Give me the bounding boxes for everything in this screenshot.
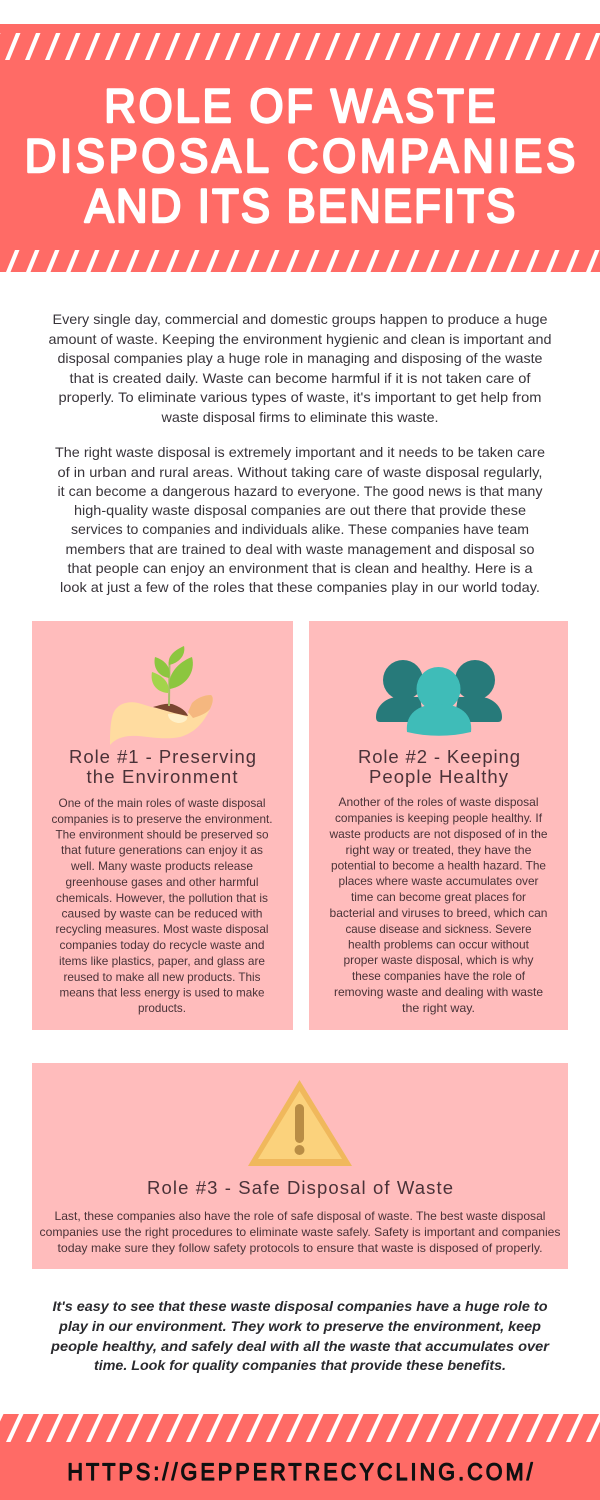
body text: The environment should be preserved so — [56, 828, 269, 842]
heading — [69, 746, 256, 787]
intro paragraph 2: look at just a few of the roles that these companies play in our world today. — [60, 580, 540, 595]
intro paragraph 1: properly. To eliminate various types of waste, it's important to get help from — [58, 390, 542, 405]
intro paragraph 1: Every single day, commercial and domestic groups happen to produce a huge — [52, 312, 548, 327]
heading: the Environment — [86, 766, 238, 787]
body text — [52, 796, 272, 1015]
body text: waste products are not disposed of in the — [328, 827, 548, 841]
conclusion text: It's easy to see that these waste disposal companies have a huge role to — [52, 1299, 548, 1314]
header banner — [0, 24, 600, 272]
body text: health problems can occur without — [348, 938, 530, 952]
bottom stripes — [0, 250, 600, 272]
icon: hand holding plant — [110, 646, 213, 745]
body text: companies today do recycle waste and — [60, 938, 264, 952]
body text: companies is to preserve the environment. — [52, 812, 272, 826]
body text: companies use the right procedures to eliminate waste safely. Safety is important and companies — [40, 1225, 561, 1239]
intro paragraph 2: services to companies and individuals alike. These companies have team — [71, 522, 529, 537]
body text: chemicals. However, the pollution that is — [56, 891, 268, 905]
body text: potential to become a health hazard. The — [331, 858, 546, 872]
intro paragraph 2: of in urban and rural areas. Without taking care of waste disposal regularly, — [58, 465, 542, 480]
body text: that future generations can enjoy it as — [61, 843, 263, 857]
conclusion text: time. Look for quality companies that provide these benefits. — [94, 1358, 506, 1373]
heading — [358, 746, 520, 787]
body text: the right way. — [402, 1001, 475, 1015]
intro paragraph 2: The right waste disposal is extremely important and it needs to be taken care — [55, 445, 545, 460]
body text: places where waste accumulates over — [338, 874, 539, 888]
panel: role 2 — [309, 621, 568, 1030]
icon: three people — [376, 660, 502, 736]
body text: items like plastics, paper, and glass are — [59, 954, 265, 968]
body text: removing waste and dealing with waste — [334, 985, 543, 999]
body text: time can become great places for — [351, 890, 526, 904]
body text: bacterial and viruses to breed, which can — [330, 906, 548, 920]
body text: right way or treated, they have the — [346, 843, 532, 857]
heading: People Healthy — [369, 766, 509, 787]
body text — [328, 795, 548, 1015]
footer banner — [0, 1414, 600, 1500]
body text — [40, 1209, 561, 1255]
body text: Another of the roles of waste disposal — [338, 795, 538, 809]
intro paragraph 1 — [48, 312, 552, 425]
body text: these companies have the role of — [352, 969, 526, 983]
intro paragraph 1: waste disposal firms to eliminate this waste. — [160, 410, 438, 425]
intro paragraph 2: it can become a dangerous hazard to everyone. The good news is that many — [58, 484, 543, 499]
body text: companies is keeping people healthy. If — [335, 811, 543, 825]
top stripes — [0, 33, 600, 60]
body text: reused to make all new products. This — [64, 970, 261, 984]
body text: cause disease and sickness. Severe — [346, 922, 532, 936]
body text: products. — [138, 1001, 186, 1015]
heading: Role #1 - Preserving — [69, 746, 256, 767]
heading: Role #3 - Safe Disposal of Waste — [147, 1177, 453, 1198]
heading: Role #2 - Keeping — [358, 746, 520, 767]
website url: HTTPS://GEPPERTRECYCLING.COM/ — [67, 1458, 533, 1485]
conclusion text — [50, 1299, 550, 1373]
body text: today make sure they follow safety protocols to ensure that waste is disposed of properly. — [58, 1241, 542, 1255]
panel: role 3 — [32, 1063, 568, 1269]
body text: means that less energy is used to make — [60, 986, 265, 1000]
icon: warning triangle — [248, 1080, 352, 1166]
conclusion text: play in our environment. They work to preserve the environment, keep — [58, 1319, 541, 1334]
body text: greenhouse gases and other harmful — [66, 875, 258, 889]
footer stripes — [0, 1414, 600, 1442]
body text: recycling measures. Most waste disposal — [56, 922, 268, 936]
body text: well. Many waste products release — [70, 859, 253, 873]
intro paragraph 2: members that are trained to deal with waste management and disposal so — [66, 542, 534, 557]
body text: caused by waste can be reduced with — [62, 906, 262, 920]
panel: role 1 — [32, 621, 293, 1030]
intro paragraph 2: that people can enjoy an environment that is clean and healthy. Here is a — [68, 561, 533, 576]
title: DISPOSAL COMPANIES — [25, 130, 575, 182]
intro paragraph 2 — [55, 445, 545, 595]
body text: Last, these companies also have the role of safe disposal of waste. The best waste disposal — [54, 1209, 546, 1223]
intro paragraph 1: disposal companies play a huge role in managing and disposing of the waste — [58, 351, 542, 366]
intro paragraph 1: amount of waste. Keeping the environment hygienic and clean is important and — [48, 332, 552, 347]
title — [25, 80, 575, 232]
intro paragraph 2: high-quality waste disposal companies are out there that provide these — [74, 503, 526, 518]
intro paragraph 1: that is created daily. Waste can become harmful if it is not taken care of — [70, 371, 531, 386]
body text: proper waste disposal, which is why — [344, 953, 534, 967]
body text: One of the main roles of waste disposal — [58, 796, 266, 810]
conclusion text: people healthy, and safely deal with all the waste that accumulates over — [50, 1339, 550, 1354]
title: AND ITS BENEFITS — [85, 180, 515, 232]
title: ROLE OF WASTE — [104, 80, 496, 132]
